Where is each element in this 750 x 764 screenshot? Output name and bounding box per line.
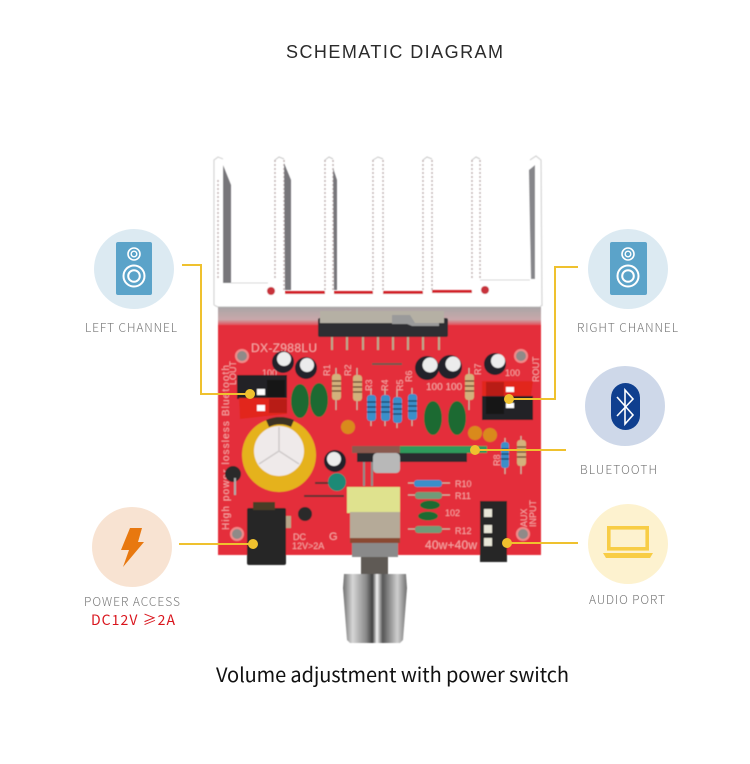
large yellow capacitor — [242, 417, 316, 492]
power jack — [247, 502, 291, 565]
label: left channel: LEFT CHANNEL — [85, 319, 177, 336]
icon: power bolt — [92, 507, 172, 587]
silkscreen text: R2 — [343, 364, 353, 376]
callout line: power — [179, 539, 258, 549]
silkscreen text: 100 — [505, 368, 520, 378]
silkscreen text: LOUT — [228, 360, 238, 385]
callout line: right channel — [504, 267, 578, 404]
resistors — [332, 368, 526, 533]
silkscreen text: High power lossless Bluetooth — [221, 365, 232, 530]
right output terminal — [482, 381, 533, 420]
film capacitors — [291, 383, 466, 435]
silkscreen text: DX-Z988LU — [251, 341, 317, 355]
silkscreen text: R7 — [473, 363, 483, 375]
silkscreen text: R8 — [492, 454, 502, 466]
silkscreen text: ROUT — [531, 356, 541, 382]
silkscreen text: 40w+40w — [425, 538, 477, 552]
electrolytic capacitors — [272, 351, 506, 472]
ceramic capacitors and transistors — [225, 420, 497, 521]
slot edges — [285, 291, 325, 294]
icon: left speaker — [94, 229, 174, 309]
mounting holes — [231, 350, 529, 540]
volume potentiometer — [343, 487, 407, 643]
icon: right speaker — [588, 229, 668, 309]
label: audio port: AUDIO PORT — [589, 591, 665, 608]
silkscreen text: 100 100 — [426, 382, 463, 393]
silkscreen text: AUX — [519, 508, 529, 527]
silkscreen text: 12V>2A — [292, 541, 324, 551]
silkscreen text: 102 — [445, 508, 460, 518]
silkscreen text: R5 — [395, 379, 405, 391]
callout line: left channel — [182, 265, 255, 399]
left output terminal — [237, 375, 287, 419]
caption: Volume adjustment with power switch — [216, 659, 569, 688]
silkscreen text: 100 — [262, 368, 277, 378]
silkscreen text: R3 — [364, 379, 374, 391]
bluetooth module — [352, 446, 487, 486]
silkscreen text: G — [329, 531, 338, 543]
icon: laptop — [588, 504, 668, 584]
callout line: audio — [502, 538, 578, 548]
silkscreen text: R12 — [455, 526, 472, 536]
label: DC12V 2A: DC12V ≥2A — [91, 610, 175, 630]
silkscreen text: R1 — [322, 364, 332, 376]
silkscreen text: DC — [293, 532, 306, 542]
heat sink — [214, 156, 542, 307]
silkscreen text: R4 — [380, 379, 390, 391]
aux input jack — [480, 501, 507, 562]
callout line: bluetooth — [470, 445, 566, 455]
silkscreen text: R11 — [455, 491, 471, 501]
fin shadows — [223, 165, 231, 283]
label: right channel: RIGHT CHANNEL — [577, 319, 678, 336]
label: bluetooth: BLUETOOTH — [580, 461, 657, 478]
silkscreen text: INPUT — [528, 499, 538, 527]
silkscreen text: R10 — [455, 479, 472, 489]
IC chip — [318, 311, 448, 350]
title: SCHEMATIC DIAGRAM — [286, 42, 503, 62]
icon: bluetooth — [585, 366, 665, 446]
silkscreen text — [221, 341, 541, 552]
label: power access: POWER ACCESS — [84, 593, 180, 610]
silkscreen text: R6 — [404, 370, 414, 382]
circuit board — [218, 307, 541, 555]
product photo: amplifier board — [214, 156, 542, 643]
